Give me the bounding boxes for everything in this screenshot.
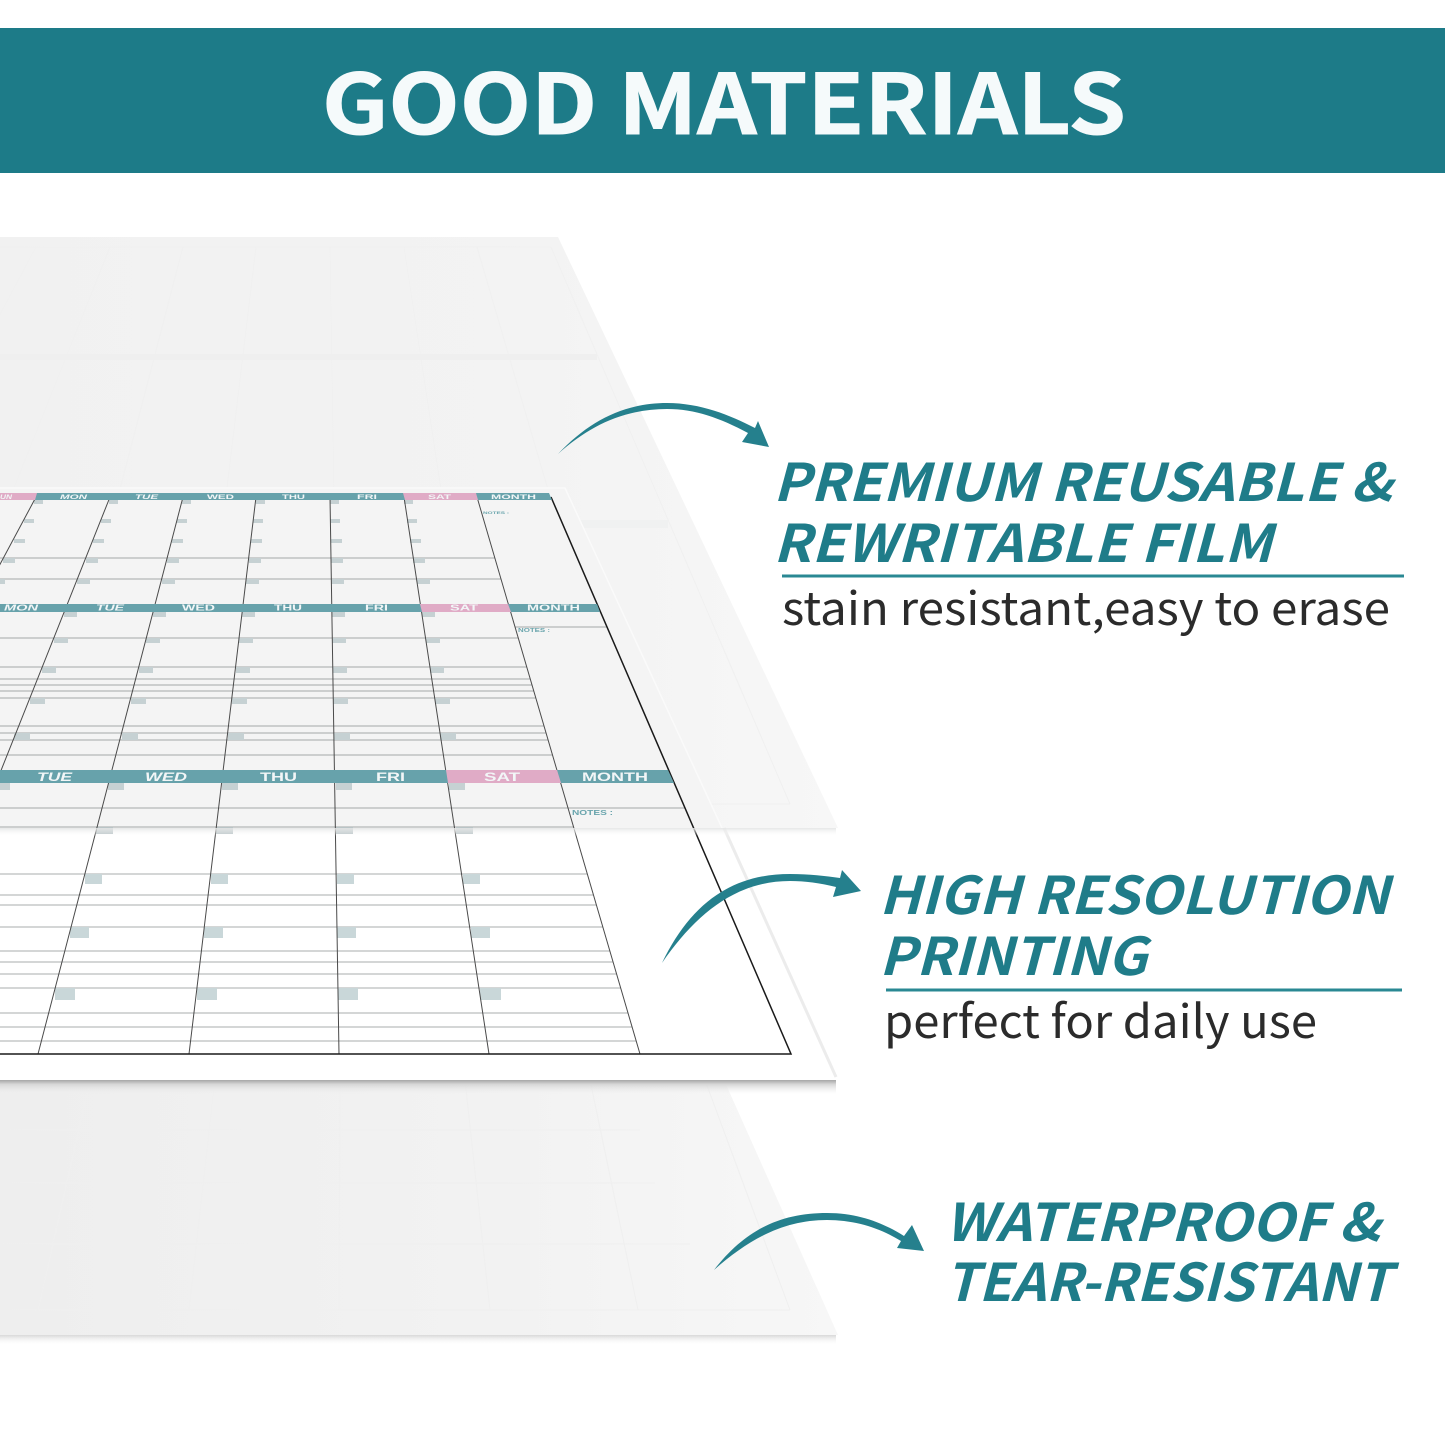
- notes labels: NOTES :: [572, 808, 613, 817]
- header row 3: TUE: [37, 772, 73, 784]
- header row 2: MONTH: [527, 602, 580, 612]
- icon: arrow to high resolution printing: [662, 870, 861, 963]
- header row 1: WED: [207, 495, 235, 501]
- panel: middle printed calendar sheet: [0, 488, 838, 1080]
- header row 1: TUE: [135, 495, 160, 501]
- header row 1: SAT: [428, 495, 452, 501]
- notes labels: NOTES :: [483, 510, 509, 515]
- shadow under the top film: [0, 828, 836, 836]
- header row 3: [0, 770, 674, 784]
- text block: premium reusable film: REWRITABLE FILM: [773, 502, 1278, 577]
- text block: premium reusable film: stain resistant,easy to erase: [782, 573, 1390, 639]
- header row 2: [0, 602, 600, 612]
- header row 2: THU: [274, 602, 302, 612]
- calendar horizontal rules: [0, 558, 685, 827]
- header row 1: [0, 493, 552, 501]
- header row 2: TUE: [96, 602, 125, 612]
- header row 3: THU: [260, 772, 297, 784]
- header row 2: WED: [182, 602, 215, 612]
- text block: waterproof and tear-resistant: WATERPROOF &: [945, 1181, 1385, 1256]
- header row 2: MON: [4, 602, 39, 612]
- text block: waterproof and tear-resistant: TEAR-RESISTANT: [945, 1241, 1400, 1316]
- header row 3: WED: [145, 772, 187, 784]
- header row 3: SAT: [484, 772, 520, 784]
- icon: arrow to waterproof film: [714, 1213, 924, 1270]
- header row 3: MONTH: [582, 772, 648, 784]
- calendar vertical rules: [0, 497, 640, 1054]
- header row 1: FRI: [357, 495, 378, 501]
- calendar rules on white area: [0, 874, 636, 1041]
- text block: high resolution printing: PRINTING: [879, 915, 1152, 990]
- header row 2: SAT: [450, 602, 479, 612]
- text block: premium reusable film: PREMIUM REUSABLE &: [773, 441, 1397, 516]
- notes labels: [483, 510, 613, 817]
- text block: high resolution printing: HIGH RESOLUTION: [879, 854, 1394, 929]
- title banner: [0, 28, 1445, 173]
- header row 1: MON: [60, 495, 88, 501]
- header row 1: MONTH: [491, 495, 536, 501]
- panel: bottom waterproof film layer: [0, 1080, 838, 1345]
- shadow under the middle sheet: [0, 1080, 836, 1094]
- calendar outer border: [0, 497, 791, 1054]
- header row 2: FRI: [365, 602, 388, 612]
- icon: arrow to premium film: [558, 403, 769, 454]
- notes labels: NOTES :: [518, 628, 551, 634]
- text block: high resolution printing: [879, 854, 1402, 1052]
- date tabs on white area: [55, 874, 501, 1000]
- header row 1: THU: [282, 495, 305, 501]
- date tabs: [0, 500, 465, 790]
- date tabs at film edge: [96, 827, 473, 834]
- panel: top transparent film layer: [0, 237, 838, 828]
- header row 1: UN: [0, 495, 13, 501]
- text block: high resolution printing: perfect for daily use: [884, 986, 1317, 1052]
- text block: premium reusable film: [773, 441, 1404, 639]
- title: GOOD MATERIALS: [322, 38, 1126, 158]
- header row 3: FRI: [376, 772, 405, 784]
- text block: waterproof and tear-resistant: [945, 1181, 1400, 1316]
